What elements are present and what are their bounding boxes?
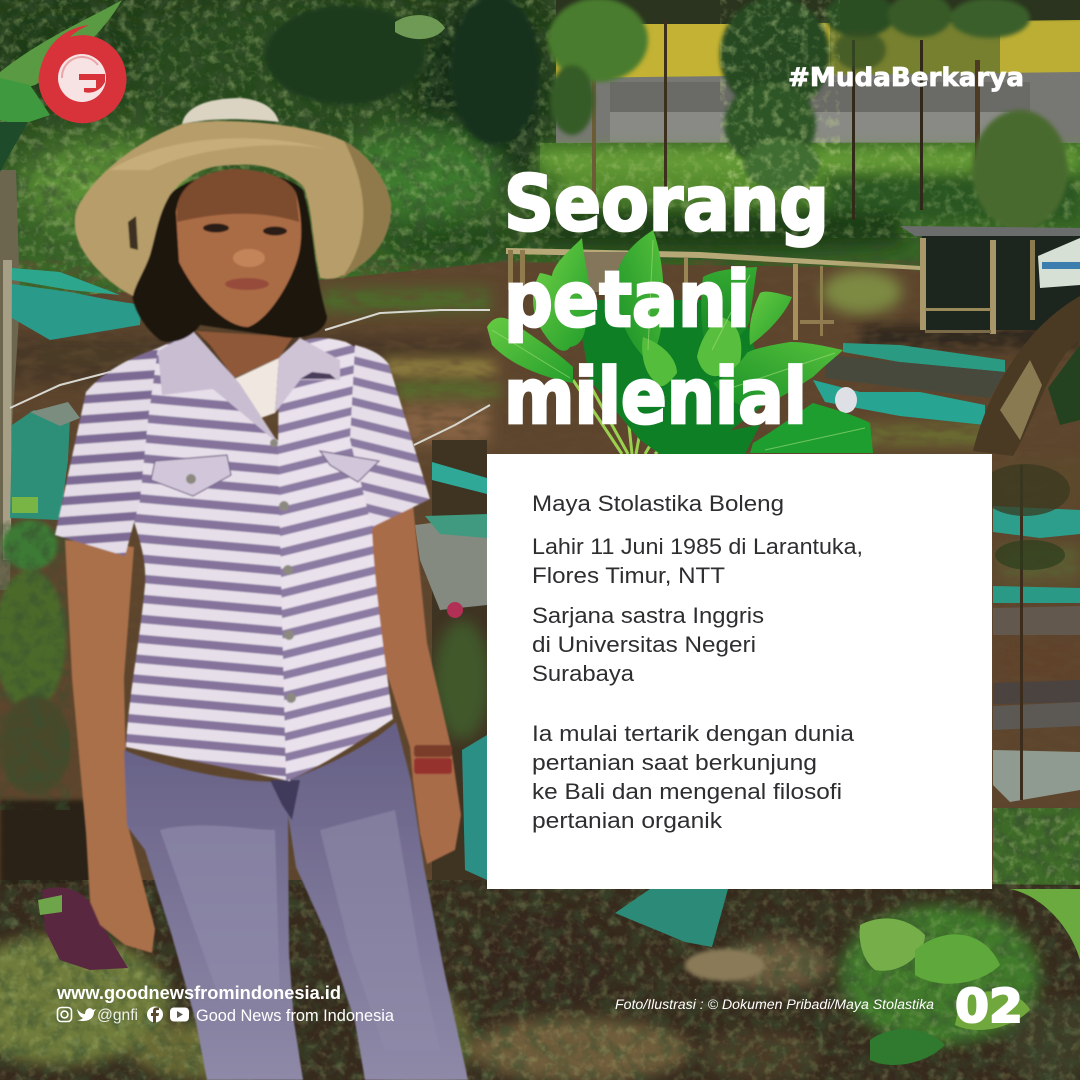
title: petani — [504, 256, 750, 345]
background: dark banana leaf right — [973, 296, 1080, 456]
neck — [196, 331, 293, 378]
shirt left front — [118, 340, 290, 781]
background: rock mound — [685, 949, 765, 981]
background: foreground leaves bottom right — [860, 889, 1080, 1065]
hair — [131, 172, 327, 342]
profile details: Flores Timur, NTT — [532, 563, 725, 588]
person: farmer in hat and striped shirt — [55, 98, 468, 1080]
profile details: ke Bali dan mengenal filosofi — [532, 779, 842, 804]
title: milenial — [504, 353, 807, 442]
profile details: pertanian organik — [532, 808, 723, 833]
hashtag: #MudaBerkarya — [788, 63, 1024, 93]
leaf: back left tall — [552, 238, 593, 325]
background: bamboo structure — [506, 248, 920, 340]
leaf: lower right — [750, 403, 873, 453]
face — [176, 169, 301, 327]
background: green plants lower right of panel — [993, 808, 1080, 898]
icon: facebook — [147, 1006, 163, 1023]
profile details: Lahir 11 Juni 1985 di Larantuka, — [532, 534, 863, 559]
profile details: Maya Stolastika Boleng — [532, 491, 784, 516]
logo: Good News from Indonesia — [38, 25, 126, 123]
website address: www.goodnewsfromindonesia.id — [56, 982, 341, 1003]
facebook and youtube name: Good News from Indonesia — [196, 1006, 395, 1025]
title: Seorang — [504, 160, 829, 249]
collar — [158, 331, 340, 444]
trousers — [124, 722, 468, 1080]
shirt left sleeve — [55, 348, 158, 556]
background: trees at top right — [265, 0, 1068, 230]
profile details: di Universitas Negeri — [532, 632, 756, 657]
leaf: dark inner mass — [575, 300, 770, 454]
social media row — [58, 1006, 395, 1025]
leaf: left big — [487, 318, 573, 383]
profile details: Ia mulai tertarik dengan dunia — [532, 721, 855, 746]
arm: right — [362, 505, 461, 864]
background: area between person and panel — [415, 440, 490, 890]
profile details: pertanian saat berkunjung — [532, 750, 817, 775]
background: young tree by the panel — [980, 464, 1070, 800]
profile details — [532, 491, 863, 833]
profile details: Sarjana sastra Inggris — [532, 603, 764, 628]
chest — [234, 358, 279, 420]
shirt right sleeve — [350, 345, 430, 527]
leaf veins — [492, 240, 865, 450]
profile details: Surabaya — [532, 661, 635, 686]
background: lower ground — [0, 880, 1080, 1080]
background: banana leaves top left — [0, 0, 445, 172]
background: plants left side — [0, 520, 95, 890]
icon: instagram — [58, 1008, 72, 1022]
plant: spinach leaves — [487, 230, 873, 454]
plant stems — [573, 340, 740, 454]
leaf: back right — [701, 267, 757, 355]
background: forest and hillside — [0, 0, 1080, 300]
icon: youtube — [170, 1008, 189, 1022]
background: grey shade net — [556, 72, 1080, 146]
leaf: right pointed — [749, 292, 792, 345]
bracelet — [414, 745, 452, 774]
straw hat — [75, 98, 391, 296]
leaf: centre right — [697, 317, 741, 376]
forehead shadow — [177, 169, 299, 222]
leaf: upper left — [533, 273, 586, 351]
background: yellow tarp — [556, 0, 1080, 78]
icon: twitter — [77, 1008, 96, 1021]
background: hut and sign — [900, 226, 1080, 334]
leaf: low centre — [690, 425, 760, 454]
leaf: back centre — [616, 230, 664, 360]
page number: 02 — [955, 979, 1023, 1033]
title — [504, 160, 829, 442]
shirt pockets — [151, 451, 379, 496]
photo credit: Foto/Ilustrasi : © Dokumen Pribadi/Maya Stolastika — [615, 997, 935, 1012]
background: teal net on ground — [615, 889, 728, 947]
background: teal shade nets right — [813, 343, 1080, 802]
arm: left — [65, 540, 155, 953]
eyes, nose and mouth — [203, 224, 287, 290]
background: small figure by the net — [835, 387, 857, 413]
panel: profile text — [487, 454, 992, 889]
background: teal shade nets left — [10, 268, 142, 520]
shirt buttons — [186, 439, 296, 703]
background: white irrigation pipes — [10, 310, 490, 445]
twitter handle: @gnfi — [97, 1007, 138, 1024]
background: green hedge terrace — [540, 143, 1080, 242]
background: red-leaf plant — [38, 887, 128, 970]
background: soil beds — [0, 260, 1080, 900]
leaf: centre — [642, 337, 677, 386]
leaf: right spreading — [713, 342, 843, 408]
shirt right front — [278, 338, 415, 781]
background: left tree trunk — [0, 170, 20, 590]
